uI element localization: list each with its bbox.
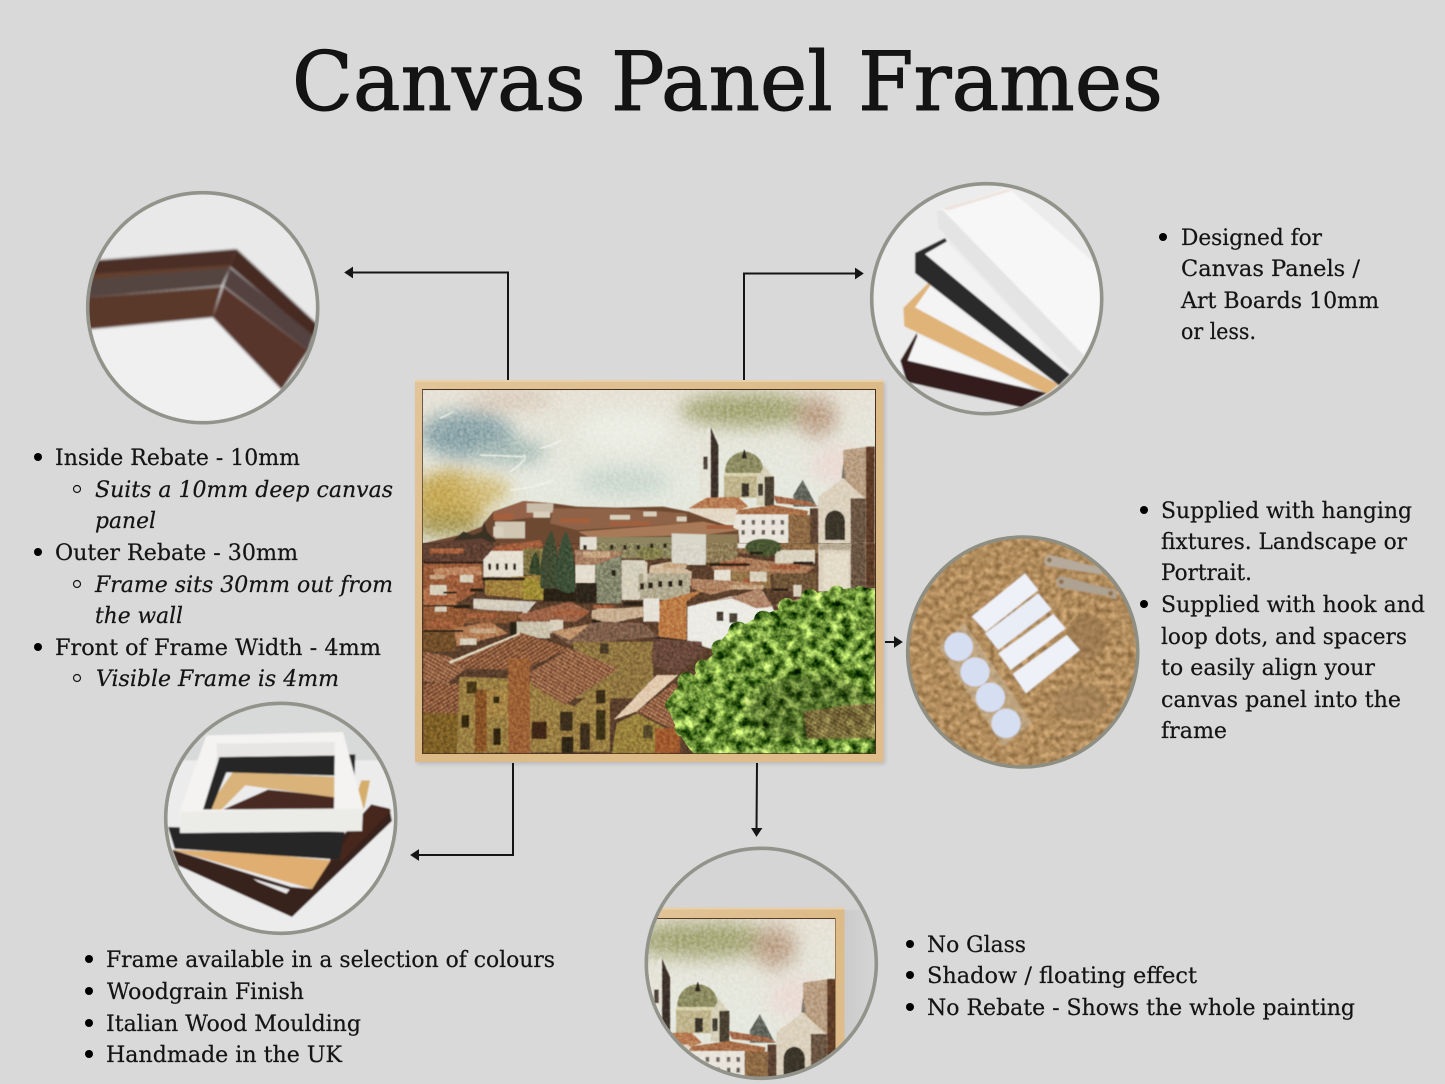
text block: rebate specifications: Outer Rebate - 30mm: [55, 541, 298, 566]
text block: rebate specifications: Suits a 10mm deep canvas: [95, 478, 393, 503]
text block: rebate specifications: [34, 446, 393, 692]
text block: designed for canvas panels: Canvas Panels /: [1181, 257, 1361, 282]
text block: colours and finish: Woodgrain Finish: [107, 980, 304, 1005]
text block: supplied fixtures: fixtures. Landscape or: [1161, 530, 1407, 555]
text block: supplied fixtures: canvas panel into the: [1161, 688, 1401, 713]
title: Canvas Panel Frames: [292, 36, 1163, 130]
circle: close-up of floating frame: [644, 846, 878, 1080]
arrow: frame to colour stack: [412, 763, 513, 859]
text block: supplied fixtures: Portrait.: [1161, 561, 1252, 586]
text block: supplied fixtures: Supplied with hanging: [1161, 499, 1412, 524]
text block: designed for canvas panels: [1159, 226, 1379, 345]
text block: rebate specifications: Front of Frame Width - 4mm: [55, 636, 381, 661]
text block: colours and finish: Frame available in a selection of colours: [106, 948, 555, 973]
text block: designed for canvas panels: Designed for: [1181, 226, 1322, 251]
text block: supplied fixtures: frame: [1161, 719, 1227, 744]
arrow: frame to fixtures: [885, 638, 901, 646]
circle: rebate corner detail: [80, 185, 325, 430]
text block: colours and finish: Handmade in the UK: [106, 1043, 343, 1068]
circle: hanging fixtures, spacers and hook and loop dots: [900, 530, 1145, 775]
arrow: frame to colours: [744, 270, 862, 380]
framed painting: [410, 380, 885, 764]
text block: supplied fixtures: [1140, 499, 1425, 744]
text block: no glass: No Rebate - Shows the whole painting: [927, 996, 1355, 1021]
text block: rebate specifications: Visible Frame is 4mm: [96, 667, 339, 692]
text block: rebate specifications: panel: [95, 509, 156, 534]
text block: colours and finish: [85, 948, 555, 1068]
text block: rebate specifications: Frame sits 30mm out from: [94, 573, 393, 598]
text block: rebate specifications: Inside Rebate - 10mm: [55, 446, 300, 471]
text block: supplied fixtures: to easily align your: [1161, 656, 1375, 681]
text block: designed for canvas panels: or less.: [1181, 320, 1256, 345]
text block: colours and finish: Italian Wood Moulding: [106, 1012, 361, 1037]
text block: no glass: No Glass: [927, 933, 1026, 958]
text block: no glass: Shadow / floating effect: [927, 964, 1197, 989]
arrow: frame to corner detail: [346, 268, 508, 381]
text block: supplied fixtures: Supplied with hook and: [1161, 593, 1425, 618]
arrow: frame to corner close-up: [753, 763, 760, 835]
circle: stack of frames: [158, 697, 403, 942]
text block: rebate specifications: the wall: [95, 604, 183, 629]
text block: supplied fixtures: loop dots, and spacers: [1161, 625, 1407, 650]
text block: no glass: [906, 933, 1355, 1021]
circle: four frame colours fanned: [865, 178, 1112, 423]
text block: designed for canvas panels: Art Boards 10mm: [1180, 289, 1379, 314]
